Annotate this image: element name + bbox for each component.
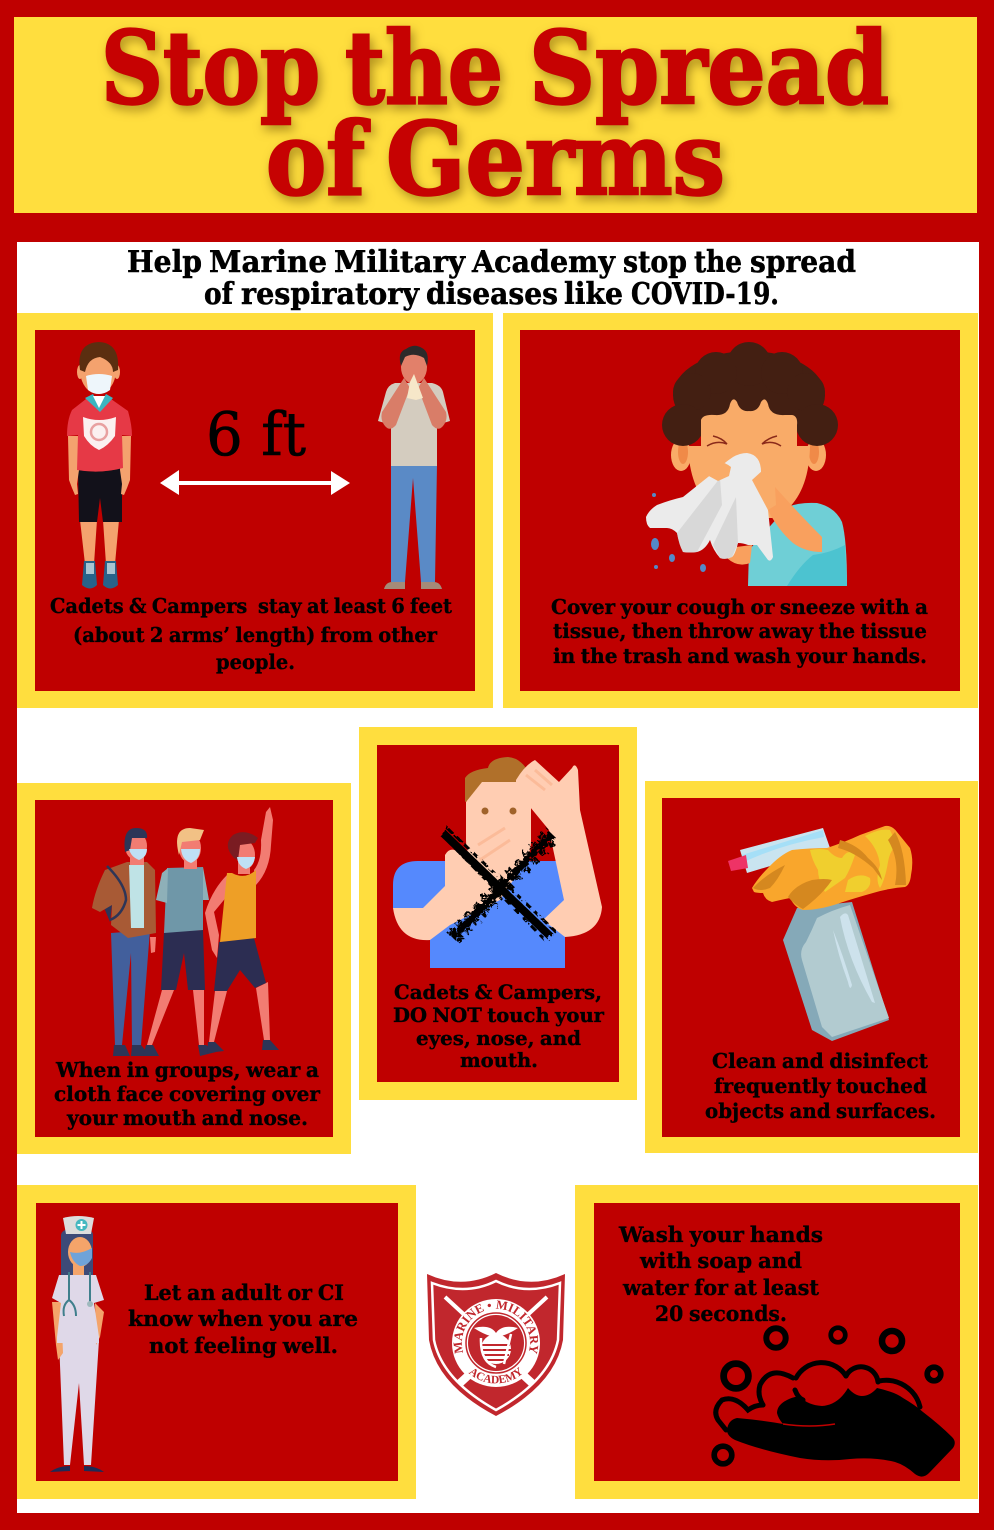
text: hand washing instruction: Wash your hands [618,1222,823,1247]
text: disinfect instruction: frequently touched [714,1074,927,1098]
title: Spread [529,9,889,127]
icon: cadet wearing mask [67,342,132,588]
logo: Marine Military Academy shield: ACADEMY [468,1367,522,1384]
text: disinfect instruction [705,1049,936,1123]
text: cough instruction: Cover your cough or sneeze with a [551,595,928,619]
text: hand washing instruction: 20 seconds. [655,1301,787,1326]
text: tell an adult instruction [128,1280,358,1358]
text: cough instruction [551,595,928,668]
text: tell an adult instruction: know when you are [128,1306,358,1331]
text: face covering instruction: cloth face covering over [54,1082,321,1106]
arrow: distance [160,470,350,495]
subtitle: of [204,277,235,312]
subtitle: Military [334,245,467,280]
text: cough instruction: in the trash and wash your hands. [553,644,927,668]
subtitle: respiratory [241,277,420,312]
subtitle: like [564,277,623,312]
icon: nurse with mask [50,1216,104,1472]
person in teal shirt [143,828,216,1056]
text: distance instruction [50,594,452,674]
text: tell an adult instruction: Let an adult or CI [144,1280,344,1305]
title: Stop [101,9,320,127]
text: face covering instruction: your mouth and nose. [66,1106,308,1130]
icon: black brush X [443,828,556,942]
title banner [14,9,977,218]
text: do not touch instruction: mouth. [460,1048,538,1072]
subtitle: spread [750,245,856,280]
panel: wear cloth face covering [17,783,351,1154]
subtitle: the [694,245,742,280]
text: distance instruction: people. [216,650,295,674]
subtitle: Help [127,245,202,280]
subtitle: Marine [209,245,327,280]
panel: wash your hands [575,1185,978,1499]
panel: do not touch your face [359,727,637,1100]
title: Germs [386,100,725,218]
subtitle: Academy [471,245,616,280]
panel: keep 6 feet apart [17,313,493,708]
text: do not touch instruction [393,980,604,1072]
text: do not touch instruction: Cadets & Campers, [394,980,602,1004]
text: do not touch instruction: eyes, nose, and [416,1026,581,1050]
text: face covering instruction: When in groups, wear a [55,1058,319,1082]
icon: man sneezing into tissue [378,346,450,589]
text: hand washing instruction: water for at least [622,1275,819,1300]
title: of [266,100,370,218]
text: disinfect instruction: objects and surfaces. [705,1099,936,1123]
person with backpack [92,828,156,1056]
icon: gloved hand with spray bottle [728,826,912,1041]
subtitle [127,245,856,312]
text: 6 ft: 6 ft [206,400,306,470]
icon: soapy hand with bubbles [714,1328,955,1477]
text: disinfect instruction: Clean and disinfect [712,1049,929,1073]
text: distance instruction: (about 2 arms’ length) from other [73,623,438,647]
panel: cover cough or sneeze [503,313,978,708]
text: hand washing instruction [618,1222,823,1326]
subtitle: diseases [426,277,558,312]
logo: Marine Military Academy shield [427,1273,565,1416]
icon: child sneezing into tissue [646,342,847,586]
text: hand washing instruction: with soap and [639,1248,802,1273]
text: tell an adult instruction: not feeling well. [149,1333,338,1358]
text: face covering instruction [54,1058,321,1130]
subtitle: COVID-19. [631,277,779,312]
panel: clean and disinfect [645,781,978,1153]
icon: three masked friends [92,807,279,1056]
panel: tell an adult [17,1185,416,1499]
person in yellow tank top waving [205,807,279,1053]
text: do not touch instruction: DO NOT touch your [393,1003,604,1027]
title [101,9,889,218]
text: cough instruction: tissue, then throw away the tissue [553,619,927,643]
logo: Marine Military Academy shield: MARINE • MILITARY [453,1300,538,1354]
text: distance instruction: Cadets & Campers stay at least 6 feet [50,594,452,618]
title: the [345,9,503,127]
subtitle: stop [623,245,687,280]
icon: person touching face crossed out [393,757,602,968]
